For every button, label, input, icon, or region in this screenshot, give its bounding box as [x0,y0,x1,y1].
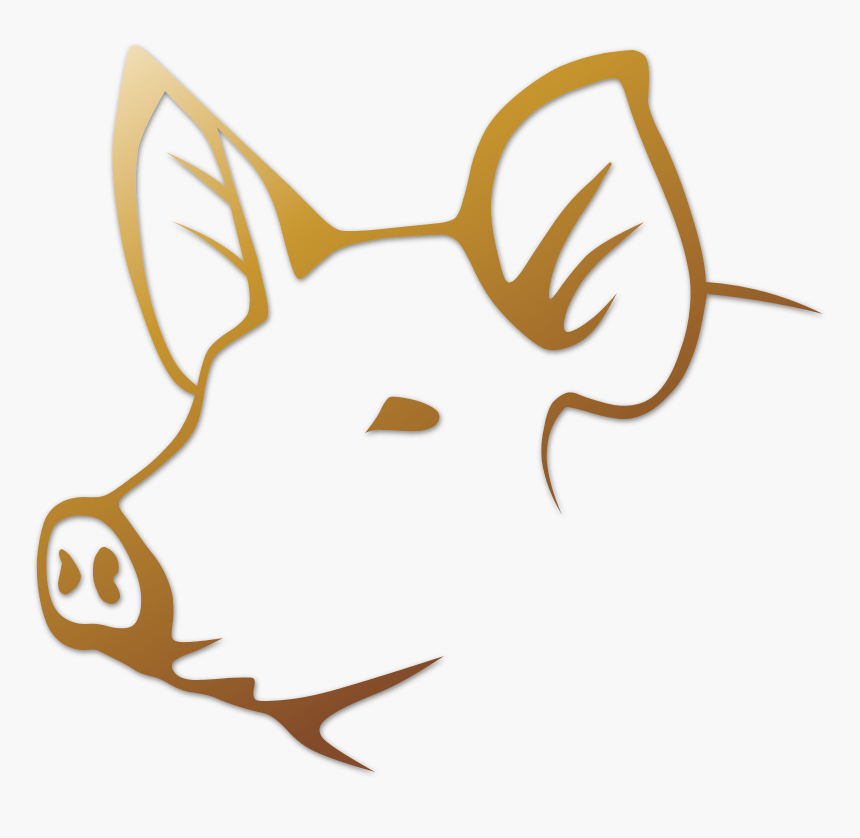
left nostril [58,549,81,594]
head outline with ears, whisker, snout and jaw [37,45,823,772]
eye [365,397,440,433]
right nostril [93,547,120,604]
pig head artwork [37,45,823,772]
